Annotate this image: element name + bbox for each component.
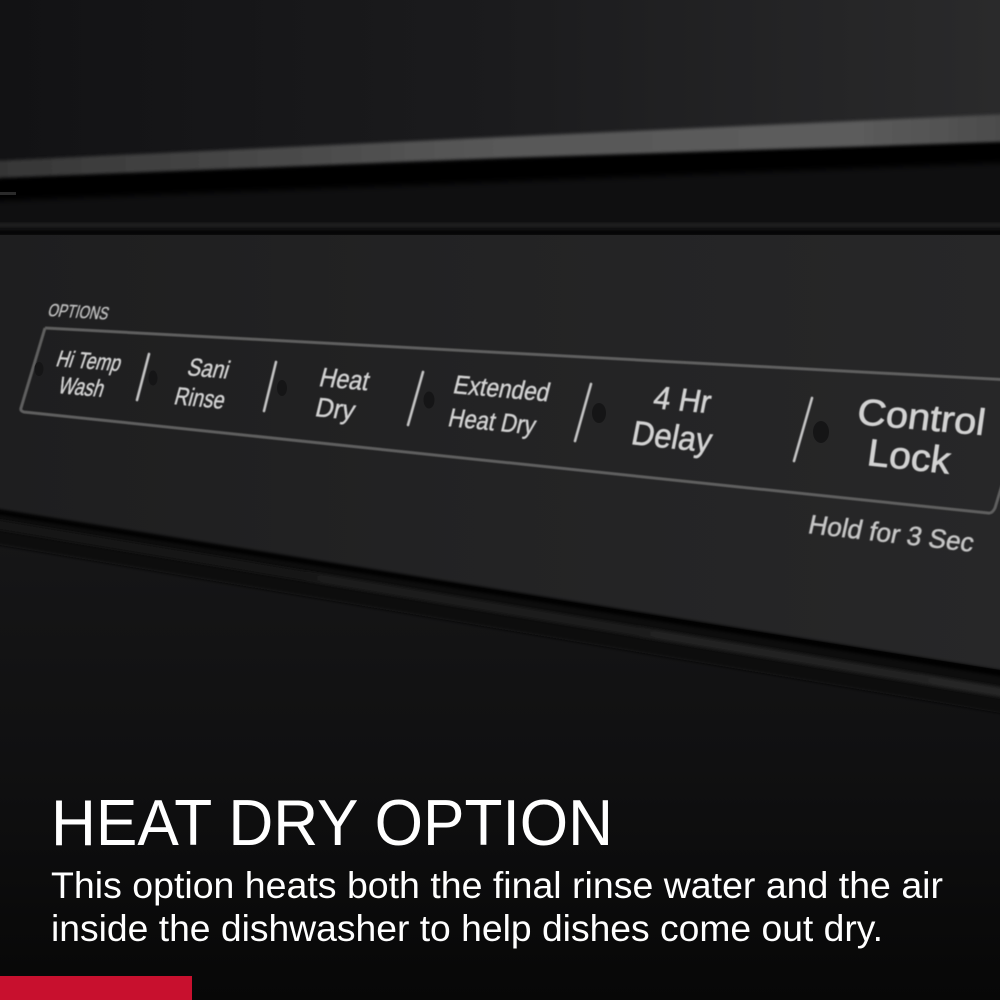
title: HEAT DRY OPTION	[51, 786, 613, 859]
option: extended heat dry: Heat Dry	[446, 403, 539, 440]
option: heat dry	[313, 362, 374, 426]
option: 4 hr delay	[628, 379, 715, 460]
indicator lights	[34, 362, 829, 443]
top appliance surface	[0, 0, 1000, 200]
panel outline	[21, 328, 1000, 513]
option: sani rinse: Rinse	[171, 383, 229, 415]
hold for 3 sec note: Hold for 3 Sec	[806, 509, 977, 558]
option: 4 hr delay: Delay	[628, 414, 715, 460]
option: control lock: Lock	[865, 432, 954, 483]
option: hi temp wash: Wash	[55, 373, 108, 403]
description: This option heats both the final rinse water and the air	[51, 865, 943, 906]
upper rail highlight	[0, 113, 1000, 234]
option: hi temp wash: Hi Temp	[53, 346, 126, 376]
option: control lock: Control	[855, 390, 988, 443]
option: sani rinse	[171, 354, 233, 415]
option: extended heat dry: Extended	[451, 370, 553, 407]
option: control lock	[855, 390, 988, 483]
red accent bar	[0, 976, 192, 1000]
option: sani rinse: Sani	[184, 354, 233, 384]
dividers	[137, 354, 812, 461]
option: extended heat dry	[446, 370, 553, 440]
option: 4 hr delay: 4 Hr	[651, 379, 715, 420]
options panel	[21, 328, 1000, 513]
option: heat dry: Dry	[313, 392, 359, 426]
option: heat dry: Heat	[316, 362, 374, 396]
lower rail	[0, 505, 1000, 718]
lower appliance surface	[0, 530, 1000, 1000]
control panel surface	[0, 235, 1000, 670]
description: inside the dishwasher to help dishes come out dry.	[51, 908, 883, 949]
description	[51, 865, 943, 949]
option: hi temp wash	[53, 346, 126, 403]
options label: OPTIONS	[46, 299, 112, 324]
recessed band below rail	[0, 130, 1000, 240]
